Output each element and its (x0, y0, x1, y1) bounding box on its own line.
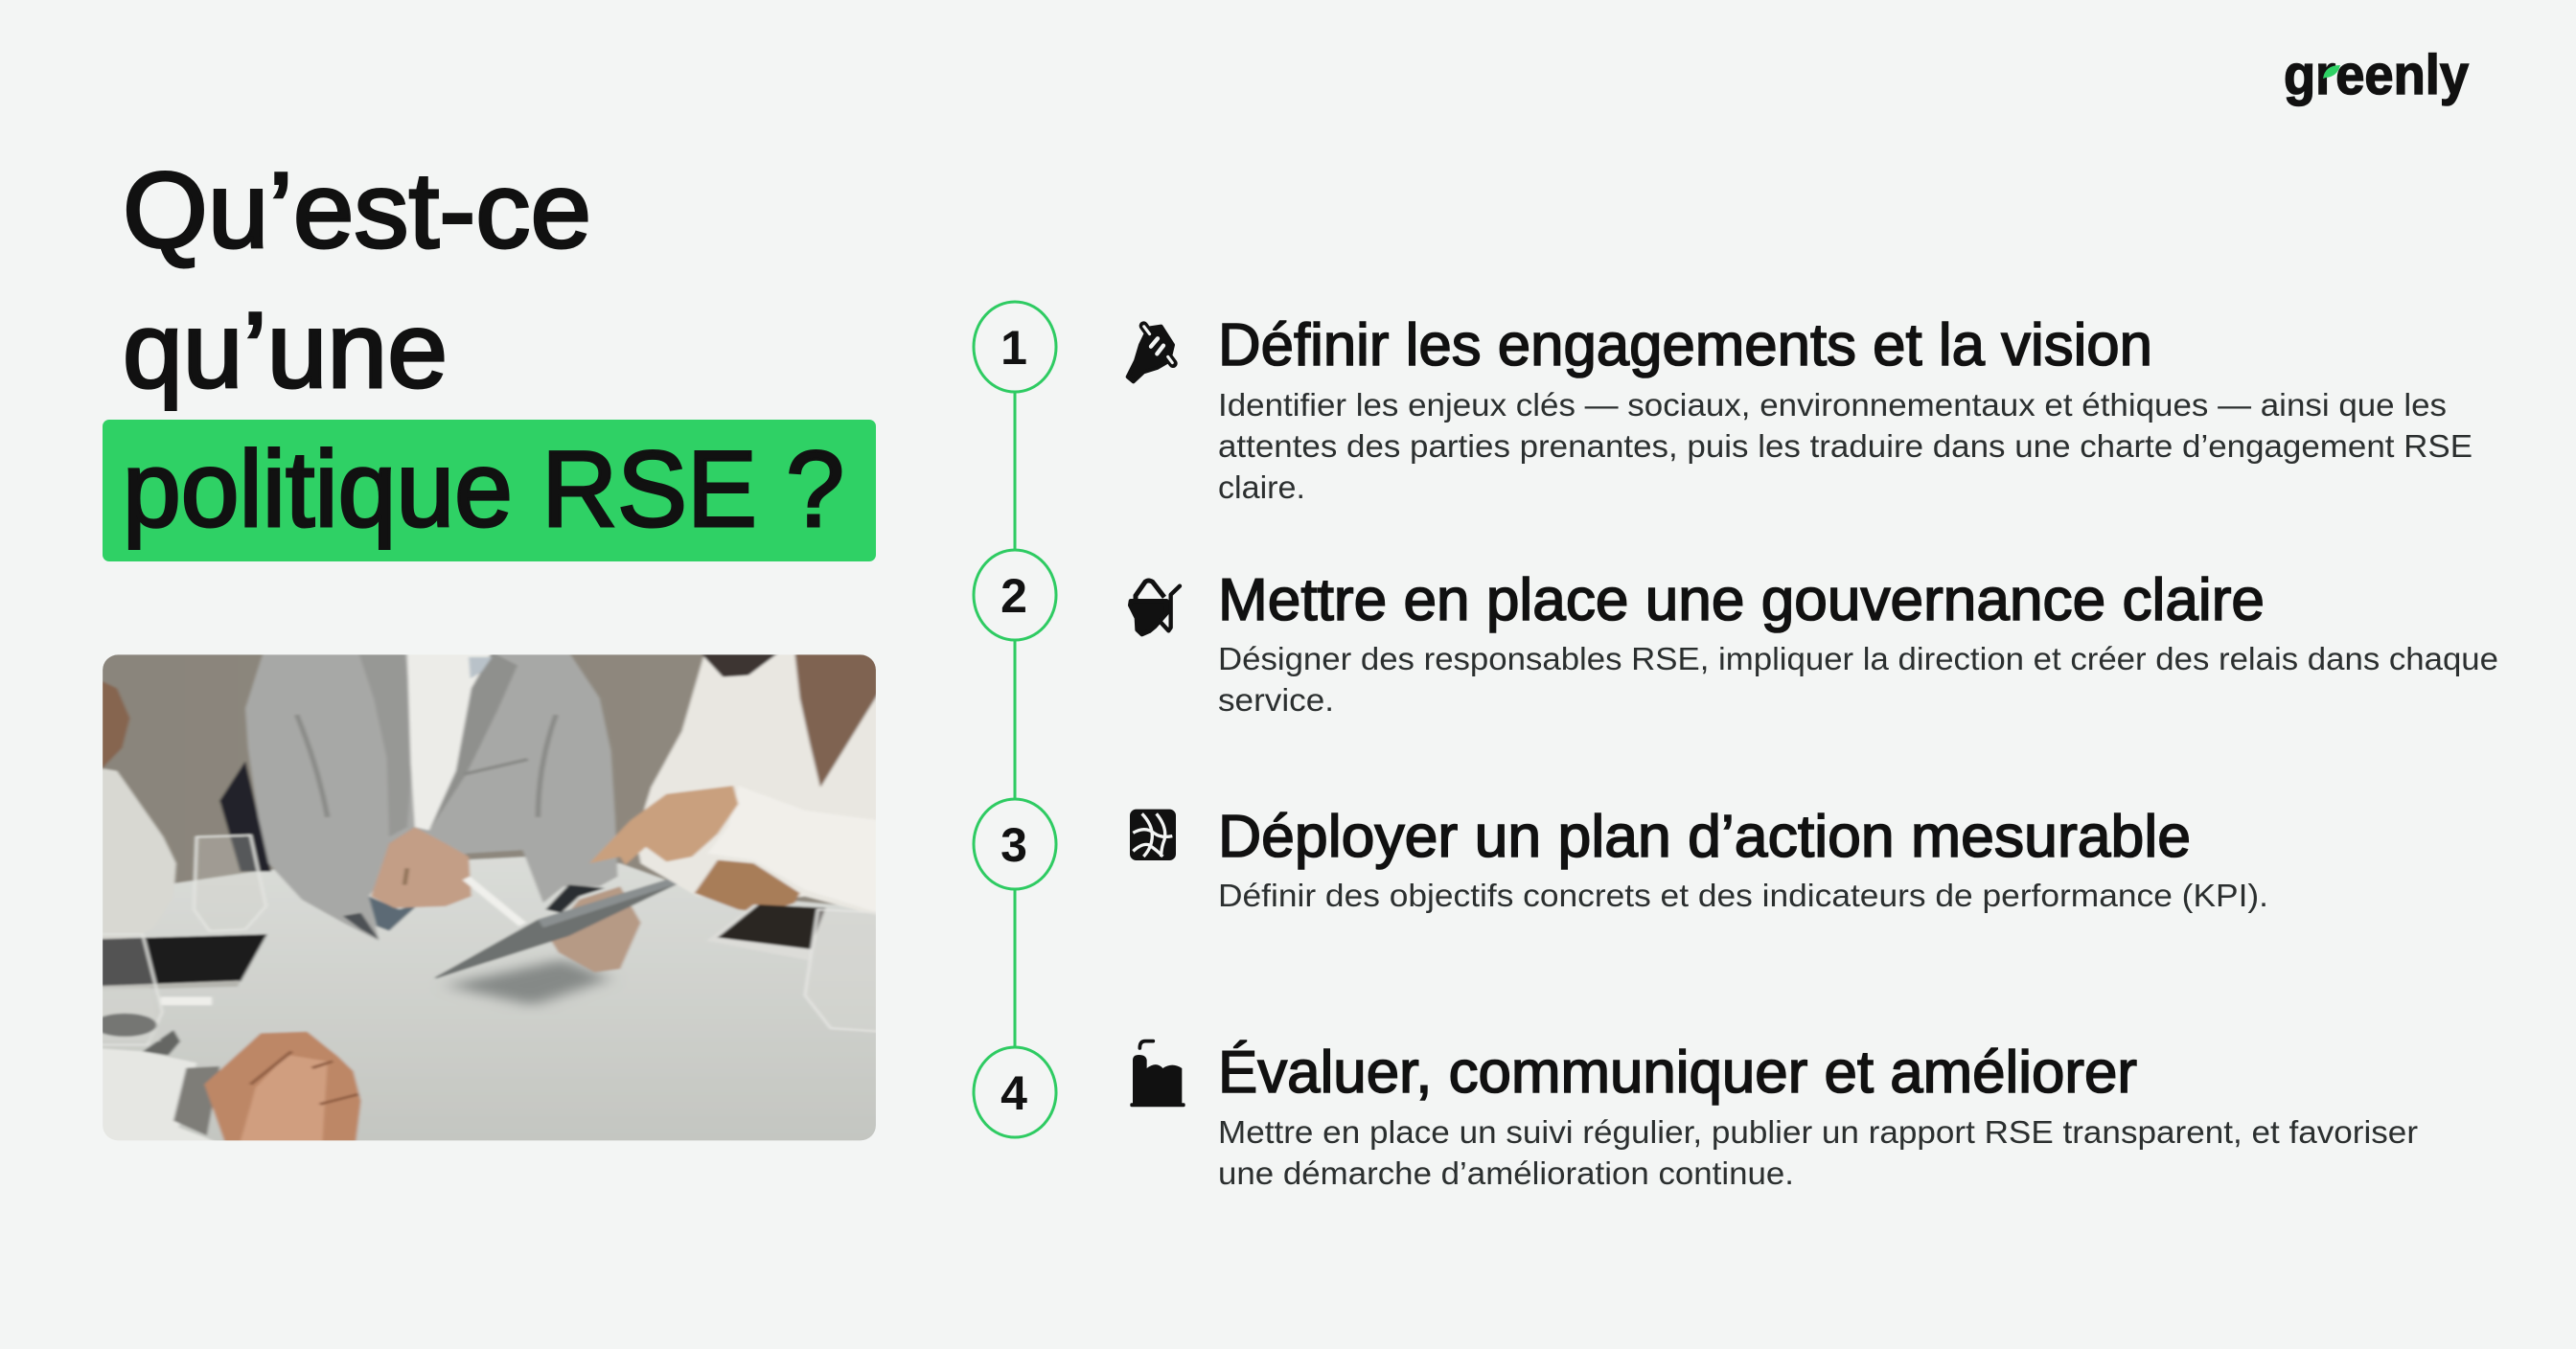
icon: network square (1130, 810, 1176, 860)
step 1 number badge: 1 (1000, 321, 1027, 375)
icon: wheelbarrow (1130, 581, 1180, 634)
step 1 description: attentes des parties prenantes, puis les traduire dans une charte d’engagement RSE (1218, 428, 2472, 464)
timeline connector (1014, 347, 1016, 1092)
title (103, 150, 876, 561)
step 1 description (1218, 387, 2472, 505)
step 2 number badge (974, 550, 1056, 640)
step 3 number badge (974, 799, 1056, 889)
step 3 description: Définir des objectifs concrets et des indicateurs de performance (KPI). (1218, 878, 2268, 913)
icon: tool (1128, 326, 1173, 381)
step 1 (974, 302, 2472, 505)
title highlight: politique RSE ? (123, 429, 844, 549)
step 2 number badge: 2 (1000, 569, 1027, 623)
step 4 description: Mettre en place un suivi régulier, publier un rapport RSE transparent, et favoriser (1218, 1114, 2418, 1150)
step 4 number badge (974, 1047, 1056, 1137)
step 1 description: claire. (1218, 469, 1305, 505)
step 1 number badge (974, 302, 1056, 392)
step 3 heading: Déployer un plan d’action mesurable (1218, 804, 2191, 870)
step 2 description: service. (1218, 682, 1334, 718)
step 1 heading: Définir les engagements et la vision (1218, 312, 2152, 378)
photo: business meeting around a tablet (103, 654, 876, 1140)
step 2 heading: Mettre en place une gouvernance claire (1218, 567, 2265, 633)
step 2 (974, 550, 2498, 718)
title: Qu’est-ce (123, 150, 591, 270)
step 4 description (1218, 1114, 2418, 1191)
step 1 description: Identifier les enjeux clés — sociaux, environnementaux et éthiques — ainsi que les (1218, 387, 2447, 423)
step 4 (974, 1040, 2418, 1191)
step 4 heading: Évaluer, communiquer et améliorer (1218, 1040, 2137, 1106)
title: qu’une (123, 290, 448, 410)
step 3 number badge: 3 (1000, 818, 1027, 872)
step 2 description (1218, 641, 2498, 718)
step 3 (974, 799, 2268, 913)
step 2 description: Désigner des responsables RSE, impliquer la direction et créer des relais dans chaque (1218, 641, 2498, 676)
logo: greenly: greenly (2284, 44, 2469, 106)
icon: factory (1130, 1041, 1185, 1107)
step 4 description: une démarche d’amélioration continue. (1218, 1155, 1794, 1191)
infographic canvas (103, 52, 2497, 1184)
step 4 number badge: 4 (1000, 1066, 1027, 1120)
